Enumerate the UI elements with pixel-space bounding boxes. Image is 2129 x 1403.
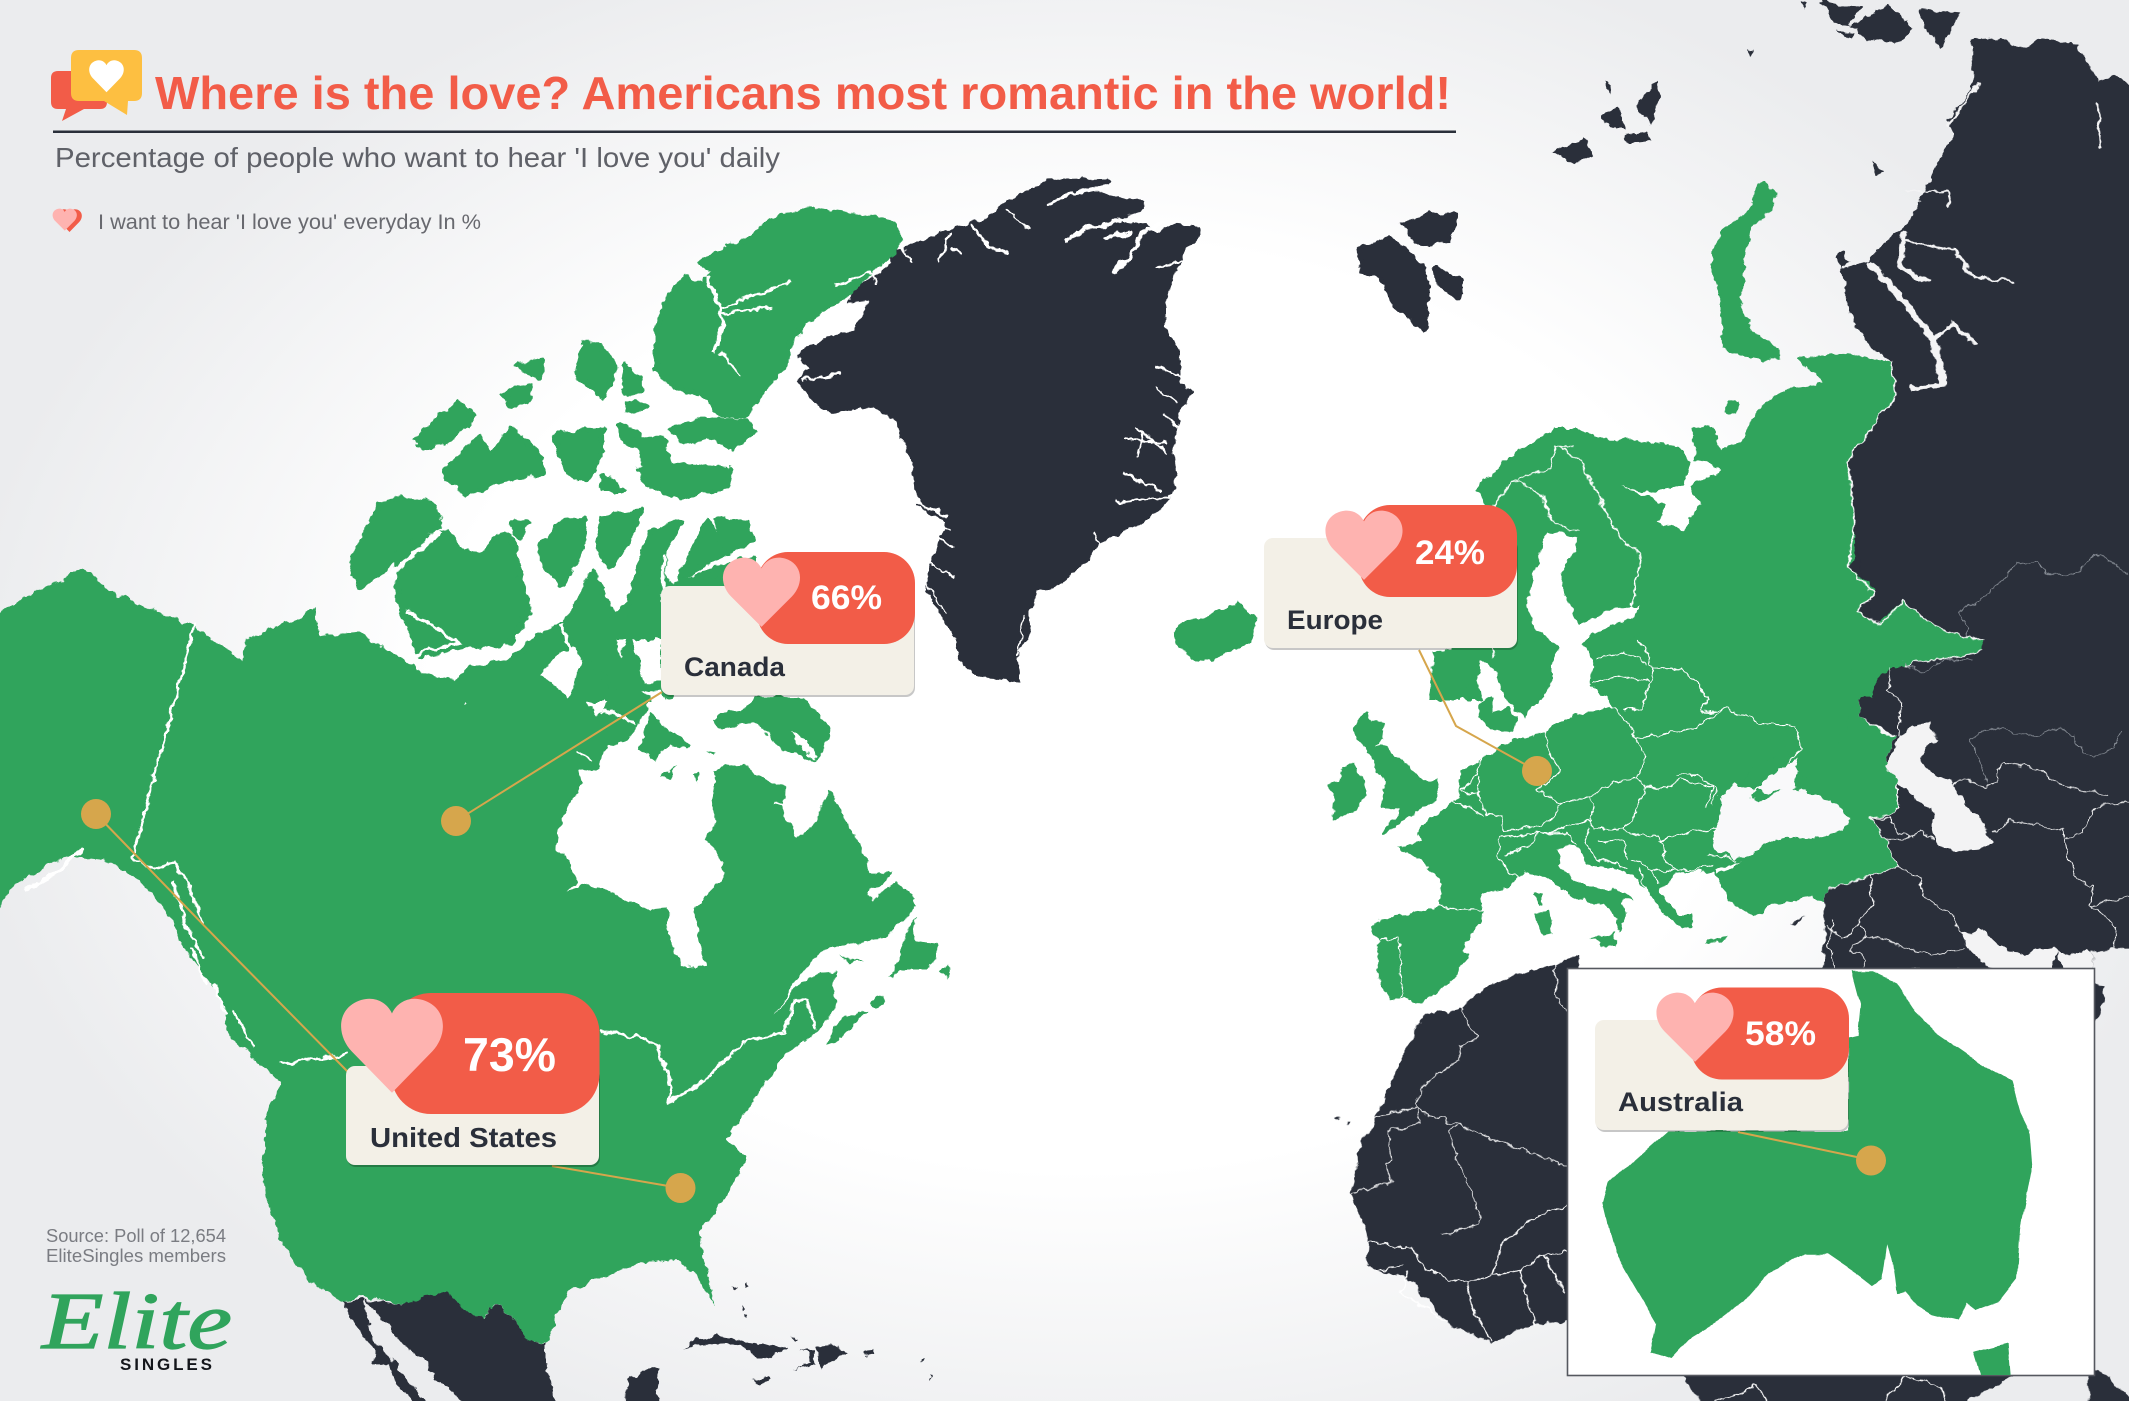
map: Greenland (797, 178, 1202, 682)
card: Europe (1264, 505, 1518, 650)
legend text: I want to hear 'I love you' everyday In % (98, 211, 481, 234)
map: country borders in Europe (1378, 640, 1801, 998)
marker dots on the map (81, 756, 1552, 1203)
card: Canada: 66% (811, 579, 882, 617)
source note: Source: Poll of 12,654 (46, 1225, 226, 1246)
legend: heart key (53, 209, 82, 232)
bottom edge strip (0, 1401, 2129, 1403)
map: Australia (1603, 971, 2032, 1382)
title rule (53, 130, 1456, 133)
map: Canada and United States mainland (0, 569, 915, 1343)
map: Russia and Scandinavia (1172, 183, 1983, 700)
map: seas cut out of the land (389, 270, 1848, 902)
map: Baltic Sea and White Sea (1527, 460, 1720, 700)
card: Europe: Europe (1287, 605, 1383, 635)
card: Canada (661, 552, 915, 697)
map: Canadian Arctic islands (351, 210, 899, 700)
connector: Australia point to card (1738, 1132, 1871, 1160)
map: borders in Africa (1351, 961, 1946, 1403)
connector: Canada point to card (456, 692, 662, 821)
panel: Australia inset (1568, 968, 2094, 1382)
source note (46, 1225, 226, 1266)
logo: EliteSingles: Elite (41, 1278, 232, 1366)
card: United States (341, 993, 600, 1167)
logo: EliteSingles: SINGLES (120, 1355, 212, 1374)
map: Caspian Sea and Arabian Gulf (1885, 723, 2093, 972)
connector: Alaska point to United States card (96, 814, 348, 1072)
map: Siberian rivers (1871, 85, 2101, 388)
map: Canada / United States border and Pacific coast (27, 625, 816, 1103)
connector: US point to card (552, 1166, 680, 1188)
card: United States: 73% (463, 1028, 556, 1081)
map: Mexico and the Caribbean (341, 1283, 933, 1403)
map: highlighted countries in green (0, 183, 1983, 1343)
card: Canada: Canada (684, 652, 786, 682)
map: Europe mainland (1330, 636, 1850, 1004)
card: Australia: 58% (1745, 1015, 1816, 1053)
title: Where is the love? Americans most romantic in the world! (155, 67, 1451, 119)
map: borders in Central Asia and the Middle East (1827, 553, 2129, 968)
source note: EliteSingles members (46, 1245, 226, 1266)
subtitle: Percentage of people who want to hear 'I love you' daily (55, 142, 780, 173)
card: Europe: 24% (1415, 534, 1485, 572)
connector: Europe point to card (1419, 650, 1537, 771)
marker dot: Australia (1856, 1146, 1886, 1176)
icon: chat bubbles with heart (51, 50, 142, 121)
map: Black Sea over Europe, Crimea (1713, 758, 1848, 875)
card: United States: United States (370, 1122, 557, 1153)
card: Australia: Australia (1618, 1087, 1744, 1117)
map: Hudson region and Atlantic Canada islands (638, 697, 948, 1043)
map: borders in Scandinavia and Russia (1487, 362, 1983, 665)
card: Australia (1595, 988, 1849, 1132)
